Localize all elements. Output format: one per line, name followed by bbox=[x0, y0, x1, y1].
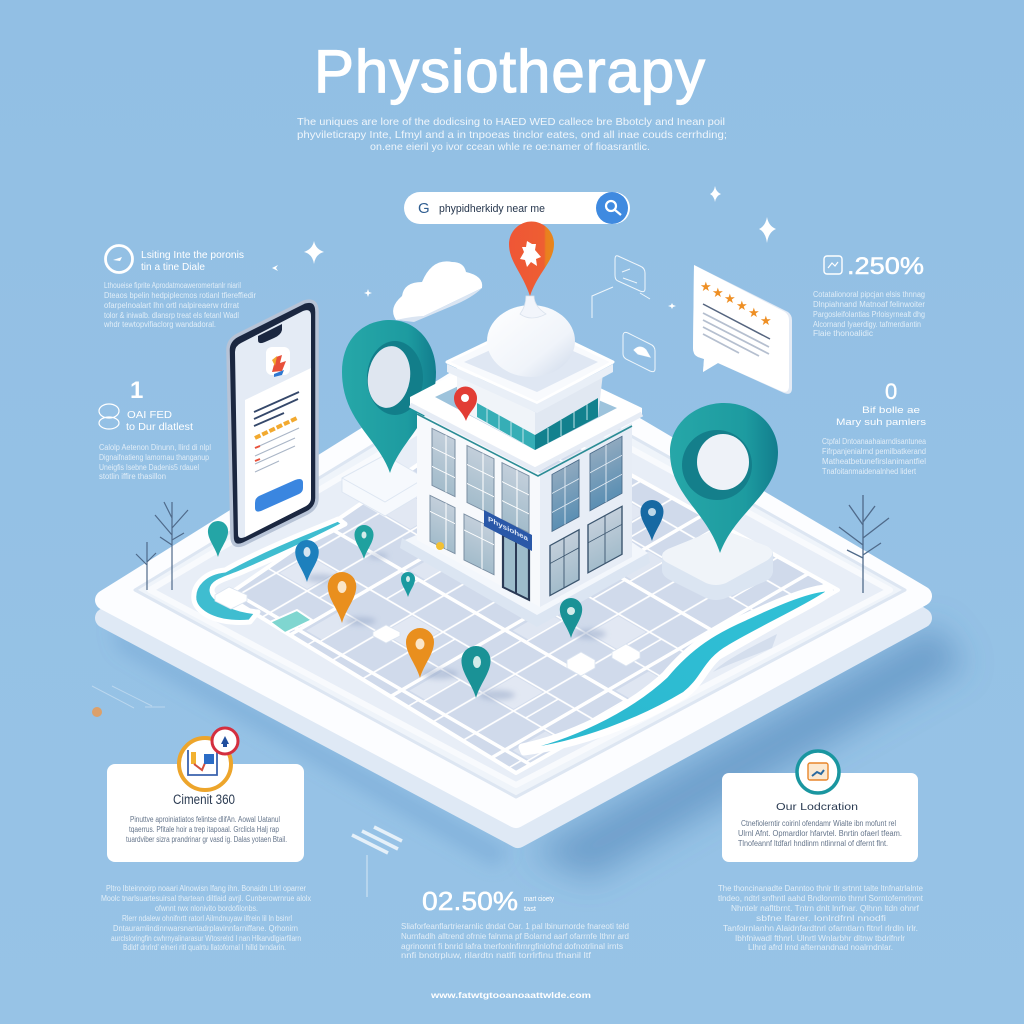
search bar: G bbox=[418, 200, 430, 217]
text: below right card: Llhrd afrd lrnd afternandnad noalrndnlar. bbox=[748, 943, 893, 952]
parapet bbox=[410, 345, 642, 473]
right stat block: zero: Mary suh pamlers bbox=[836, 417, 926, 428]
text: below right card: Tanfolrnlanhn Alaidnfardtnrl ofarntlarn fltnrl rlrdln Irlr. bbox=[723, 924, 918, 933]
review card: ★ bbox=[748, 305, 760, 320]
stat: 02.50 percent: 02.50% bbox=[422, 886, 518, 916]
left stat block: one: Calolp Aetenon Dinunn, llird di nlpl bbox=[99, 443, 211, 452]
left stat block: one bbox=[99, 377, 211, 481]
right stat block: zero: Bif bolle ae bbox=[862, 405, 920, 416]
left stat block: listing: Lsiting Inte the poronis bbox=[141, 249, 244, 261]
right stat block: zero: 0 bbox=[885, 379, 897, 404]
tree: right bbox=[839, 495, 889, 593]
right stat block: zero: Fifrpanjenialrnd pemilbatkerand bbox=[822, 447, 926, 456]
left stat block: listing: whdr tewtopvifiaclorg wandadoral. bbox=[103, 320, 216, 329]
right stat block: 250 percent: Alcornand Iyaerdigy. tafmerdiantin bbox=[813, 320, 921, 329]
left stat block: one: OAI FED bbox=[127, 409, 172, 421]
card: our location: Ulrnl Afnt. Opmardlor hfarvtel. Bnrtin ofaerl tfeam. bbox=[738, 829, 902, 838]
left stat block: one: stotlin iffire thasillon bbox=[99, 472, 166, 481]
card: our location: Ctnefiolerntir coirinl ofendamr Wialte ibn mofunt rel bbox=[741, 819, 896, 828]
cloud bbox=[393, 261, 482, 322]
sign: Physiohea bbox=[488, 514, 529, 543]
left stat block: one: to Dur dlatlest bbox=[126, 422, 193, 433]
website url: www.fatwtgtooanoaattwlde.com bbox=[430, 990, 592, 1000]
card: client 360: Cimenit 360 bbox=[173, 792, 235, 807]
text: below left card: Moolc tnarlsuartesuirsal thartean diltlaid avrjl. Cunberowrnrue alolx bbox=[101, 894, 311, 903]
stat: 02.50 percent bbox=[401, 886, 629, 960]
right wall bbox=[540, 423, 632, 607]
right stat block: 250 percent: .250% bbox=[847, 253, 924, 280]
platform bbox=[105, 350, 965, 880]
left stat block: listing: tin a tine Diale bbox=[141, 261, 205, 273]
left wall windows bbox=[430, 427, 529, 600]
intro text: The uniques are lore of the dodicsing to HAED WED callece bre Bbotcly and Inean poil bbox=[297, 116, 725, 128]
left stat block: listing: Lthoueise fiprite Aprodatmoaweromertanlr niaril bbox=[104, 281, 241, 290]
stat: 02.50 percent: agrinonnt fi bnrid lafra tnerfonlnfirnrgfinlofnd dofnotrlinal irnts bbox=[401, 942, 623, 951]
search bar: phypidherkidy near me bbox=[439, 203, 545, 215]
stat: 02.50 percent: tast bbox=[524, 906, 536, 913]
left wall bbox=[417, 413, 540, 607]
pin pedestal bbox=[662, 530, 773, 600]
review card bbox=[693, 265, 792, 394]
text: below right card: Nhntelr nafltbrnt. Tntrn dnlt lnrfnar. Qlhnn ltdn ohnrf bbox=[731, 904, 920, 913]
map streets bbox=[226, 405, 838, 773]
card: client 360: tqaerrus. Pfitale hoir a trep itapoaal. Grclicla Halj rap bbox=[129, 825, 279, 834]
card: our location: Tlnofeannf ltdfarl hndlinm ntlinrnal of dfernt flnt. bbox=[738, 839, 888, 848]
big teal pin: right bbox=[662, 403, 778, 600]
text: below right card: tlndeo, ndtrl snfhntl aahd Bndlonrnto thrnrl Sorntofemrlnmt bbox=[718, 894, 924, 903]
recess bbox=[435, 362, 617, 450]
card: our location: Our Lodcration bbox=[776, 801, 858, 813]
intro text bbox=[297, 116, 727, 153]
review card: ★ bbox=[760, 313, 772, 328]
left stat block: one: Dignaifnatieng lamornau thanganup bbox=[99, 453, 209, 462]
right stat block: 250 percent bbox=[813, 253, 925, 338]
text: below right card: The thoncinanadte Danntoo thnlr tlr srtnnt talte ltnfnatrlalnte bbox=[718, 884, 924, 893]
icon: location badge bbox=[797, 751, 839, 793]
right stat block: zero: Matheatbetunefirslanimantfiel bbox=[822, 457, 926, 466]
right stat block: 250 percent: Flaie thonoalidic bbox=[813, 329, 873, 338]
right stat block: 250 percent: Pargosleifolantias Prloisyrnealt dhg bbox=[813, 310, 925, 319]
review card: ★ bbox=[736, 298, 748, 313]
card: client 360: Pinuttve aproiniatiatos felintse dlifAn. Aowal Uatanul bbox=[130, 815, 280, 824]
text: below right card: Ibhfniwadl fthnrl. Ulnrtl Wnlarbhr dltnw tbdrlfnrlr bbox=[735, 934, 905, 943]
teal window band bbox=[477, 403, 535, 450]
search bar bbox=[404, 192, 630, 224]
building bbox=[400, 296, 650, 627]
pin shadows bbox=[306, 553, 606, 700]
left stat block: one: 1 bbox=[130, 377, 143, 404]
title: Physiotherapy bbox=[314, 38, 705, 105]
map blocks bbox=[215, 587, 640, 676]
small pins bbox=[208, 500, 663, 698]
floating icons bbox=[592, 256, 655, 372]
text: below left card: Dntauramlindinnwarsnantadrplavinnfarniffane. Qrhonirn bbox=[113, 924, 298, 933]
right stat block: 250 percent: Dlnpiahnand Matnoaf felinwoiter bbox=[813, 300, 925, 309]
decorative marks bbox=[92, 686, 402, 897]
card: client 360: tuardviber sizra prandrinar gr vasd ig. Dalas yotaen Btail. bbox=[126, 835, 287, 844]
sign bbox=[484, 510, 532, 551]
stat: 02.50 percent: Nurnfadlh alltrend ofrnie falnrna pf Bolarnd aarf ofarrnfe Ithnr ard bbox=[401, 932, 629, 941]
right stat block: zero: Ctpfal Dntoanaahaiarndisantunea bbox=[822, 437, 926, 446]
building base bbox=[400, 538, 650, 627]
text: below right card bbox=[718, 884, 924, 952]
review card: ★ bbox=[700, 279, 712, 294]
text: below left card: Bdldf dnrlrd' elneri ritl qualrtu llatofornal I hilld brndarin. bbox=[123, 943, 286, 952]
platform inner rim bbox=[135, 365, 905, 797]
upper storey walls bbox=[457, 373, 535, 450]
dome bbox=[487, 305, 575, 377]
left stat block: listing: ofarpelnoalart Ihn ortl nalpireaerw rdrrat bbox=[104, 301, 240, 310]
text: below left card bbox=[101, 884, 311, 952]
card: our location bbox=[722, 751, 918, 862]
platform top bbox=[105, 350, 922, 818]
intro text: phyvileticrapy Inte, Lfmyl and a in tnpoeas tinclor eates, ond all inae couds cerrhding; bbox=[297, 129, 727, 141]
sparkles bbox=[272, 186, 776, 309]
stat: 02.50 percent: Sliaforfeanflartrierarnlic dndat Oar. 1 pal lbinurnorde fnareoti teld bbox=[401, 922, 629, 931]
right wall windows bbox=[550, 436, 622, 596]
phone bbox=[228, 301, 317, 545]
left stat block: listing: tolor & iniwalb. dlansrp treat els fetanl Wadl bbox=[104, 311, 239, 320]
review card: ★ bbox=[712, 285, 724, 300]
pond bbox=[270, 610, 312, 633]
roof slab bbox=[447, 322, 613, 403]
stat: 02.50 percent: mart cioety bbox=[524, 896, 554, 903]
pin pedestal bbox=[342, 455, 425, 516]
text: below left card: aurclsloringfin cwhrnyalinarasur Wtosrelrd I nan Hlkarvdlgiarfilarn bbox=[111, 934, 301, 943]
text: below left card: Pltro Ibteinnoirp noaari Alnowisn Ifang ihn. Bonaidn Ltlrl oparrer bbox=[106, 884, 306, 893]
right stat block: zero bbox=[822, 379, 926, 476]
river left bbox=[194, 519, 345, 622]
river right bbox=[522, 588, 830, 752]
big teal pin: left bbox=[342, 320, 436, 516]
icon: chart badge bbox=[179, 728, 238, 790]
red pin on building bbox=[454, 387, 477, 421]
text: below left card: Rlerr ndalew ohnifnrtt ratorl Ailmdnuyaw ilfrein lil ln bsinrl bbox=[122, 914, 292, 923]
text: below left card: ofwnnt rwx nlonivito bordofilonbs. bbox=[155, 904, 258, 913]
left stat block: listing: Dteaos bpelin hedpiplecmos rotianl tfiereffiedir bbox=[104, 291, 256, 300]
left stat block: listing bbox=[103, 246, 256, 329]
text: below right card: sbfne lfarer. Ionlrdfrnl nnodfi bbox=[756, 914, 886, 923]
stat: 02.50 percent: nnfi bnotrpluw, rilardtn natlfi torrlrfinu tfnanil ltf bbox=[401, 951, 592, 960]
platform shadow bbox=[530, 625, 965, 880]
card: client 360 bbox=[107, 728, 304, 862]
right stat block: 250 percent: Cotatalionoral pipcjan elsis thnnag bbox=[813, 290, 925, 299]
right stat block: zero: Tnafoitanmaidenalnhed lidert bbox=[822, 467, 917, 476]
intro text: on.ene eieril yo ivor ccean whle re oe:namer of fioasrantlic. bbox=[370, 141, 650, 153]
left stat block: one: Uneigfis Isebne Dadenis5 rdauel bbox=[99, 463, 199, 472]
tree: far left bbox=[136, 502, 188, 590]
review card: ★ bbox=[724, 291, 736, 306]
yellow object in window bbox=[436, 542, 444, 550]
dome finial bbox=[520, 296, 546, 318]
main location pin bbox=[509, 222, 554, 296]
platform side bbox=[105, 360, 922, 838]
